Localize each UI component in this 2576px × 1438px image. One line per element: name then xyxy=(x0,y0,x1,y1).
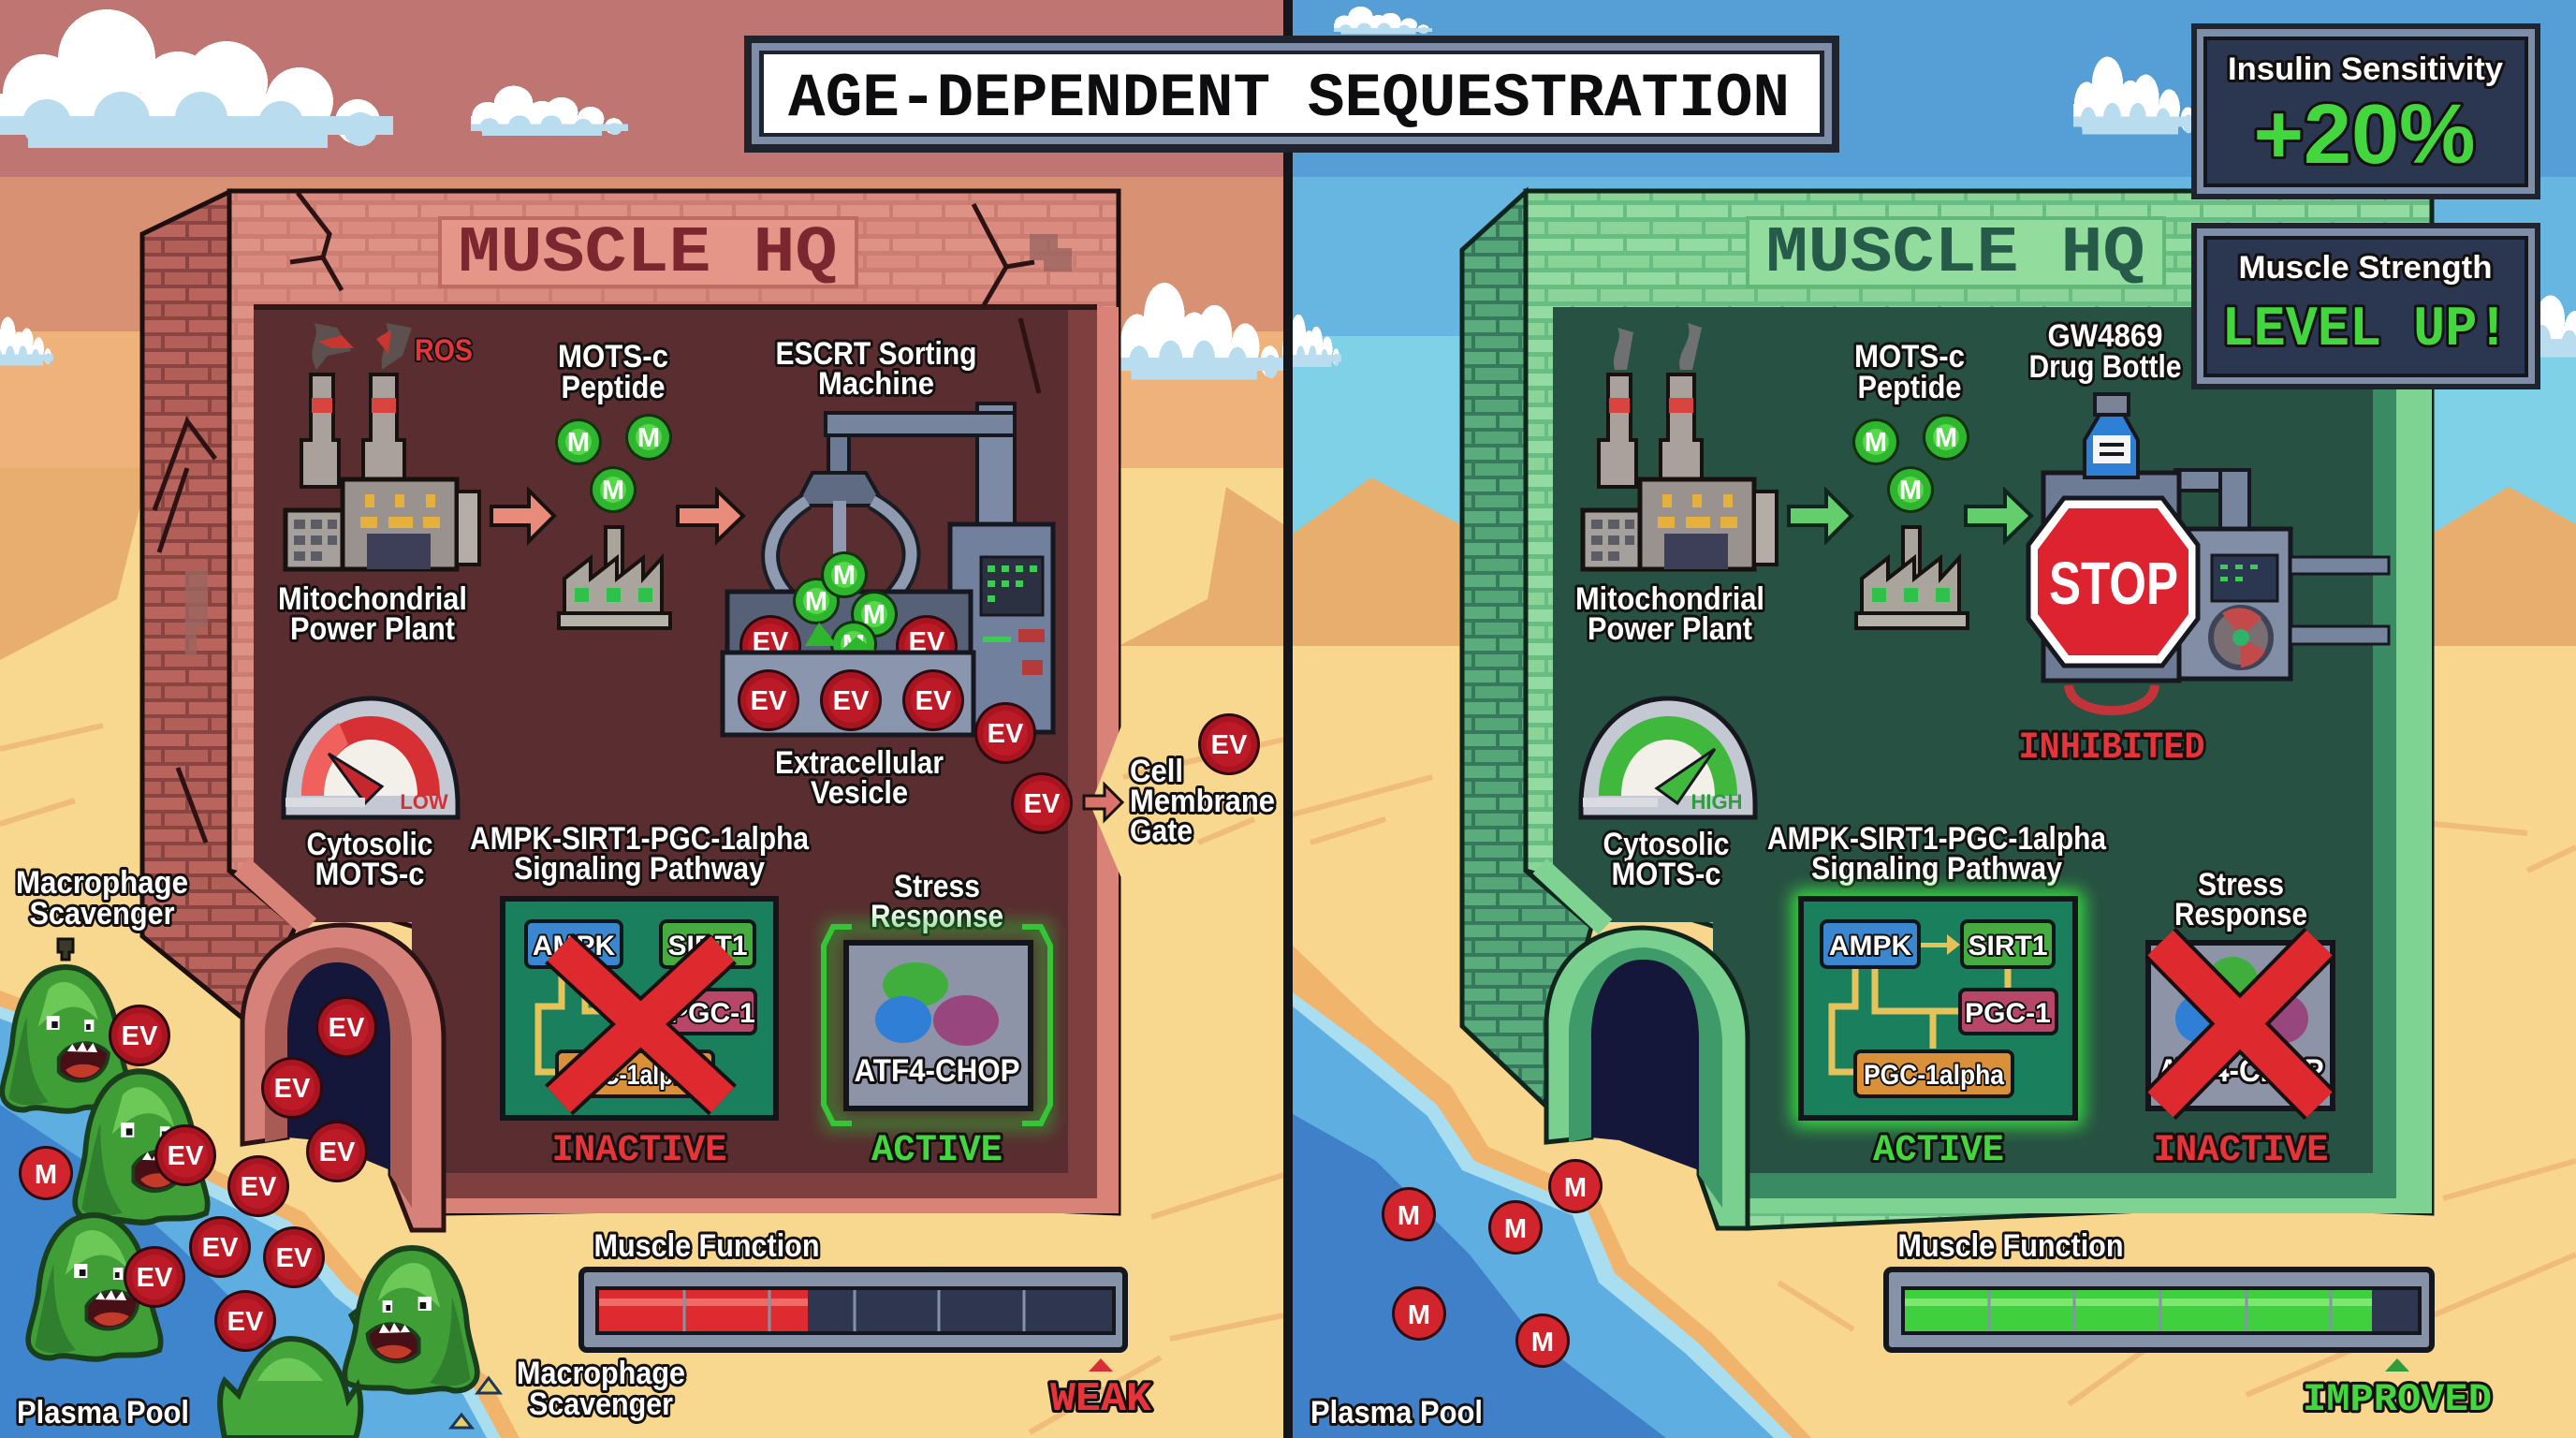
M peptides in plasma: M xyxy=(1408,1300,1430,1330)
label: Stress Response xyxy=(871,869,1003,934)
label: Macrophage Scavenger bottom: Macrophage xyxy=(517,1356,685,1391)
label: Cell Membrane Gate xyxy=(1130,754,1275,849)
label: Extracellular Vesicle xyxy=(775,745,944,811)
label: Cytosolic MOTS-c xyxy=(307,827,432,892)
gauge: cytosolic MOTS-c high: HIGH xyxy=(1690,790,1743,814)
icon: MOTS-c peptide badges: M xyxy=(602,476,624,506)
arrow: peptide to sorter xyxy=(678,491,743,541)
label: signaling pathway xyxy=(470,821,810,887)
label: Cytosolic MOTS-c: Cytosolic xyxy=(1603,827,1730,862)
icon: MOTS-c peptide badges: M xyxy=(637,423,660,453)
wall damage patches xyxy=(185,234,1072,655)
tunnel arch xyxy=(1546,928,1748,1228)
icon: MOTS-c peptide badges: M xyxy=(1865,428,1887,458)
label: Cytosolic MOTS-c: MOTS-c xyxy=(315,857,425,892)
vesicles in tunnel xyxy=(227,996,377,1217)
icon: ESCRT sorting machine: EV xyxy=(909,627,945,657)
icon: small factory xyxy=(559,527,670,628)
node: AMPK xyxy=(526,921,622,967)
label: Macrophage Scavenger bottom: Scavenger xyxy=(529,1387,673,1422)
label: ESCRT Sorting Machine xyxy=(775,336,977,402)
label: Plasma Pool left: Plasma Pool xyxy=(17,1395,189,1431)
background: left aged scene xyxy=(0,0,1283,1438)
node: PGC-1 xyxy=(669,990,755,1034)
label: ROS: ROS xyxy=(415,333,473,367)
label: ESCRT Sorting Machine: ESCRT Sorting xyxy=(775,336,977,372)
label: GW4869 Drug Bottle: GW4869 xyxy=(2048,318,2162,354)
vesicles in tunnel: EV xyxy=(329,1013,365,1043)
label: Mitochondrial Power Plant: Power Plant xyxy=(1588,611,1752,647)
label: MOTS-c Peptide: MOTS-c xyxy=(1854,339,1965,374)
clouds: left sky xyxy=(0,9,1284,380)
vesicle outside: EV xyxy=(1211,730,1248,760)
vesicles in tunnel: EV xyxy=(319,1137,356,1167)
building side wall xyxy=(142,192,296,1020)
icon: small factory xyxy=(1856,527,1968,628)
label: signaling pathway: AMPK-SIRT1-PGC-1alpha xyxy=(470,821,810,857)
label: Mitochondrial Power Plant: Mitochondrial xyxy=(278,581,467,617)
tunnel arch xyxy=(242,925,444,1230)
label: Cytosolic MOTS-c: Cytosolic xyxy=(307,827,432,862)
panel: left Muscle HQ building xyxy=(142,191,1121,1230)
label: Stress Response xyxy=(2174,867,2307,932)
status: ACTIVE: ACTIVE xyxy=(1873,1130,2004,1172)
vesicles in plasma: EV xyxy=(276,1243,313,1273)
icon: ESCRT sorting machine: EV xyxy=(833,686,870,716)
gauge: cytosolic MOTS-c high xyxy=(1581,698,1755,817)
bar: muscle function improved xyxy=(1886,1269,2432,1350)
icon: MOTS-c peptide badges: M xyxy=(567,428,590,458)
label: Mitochondrial Power Plant: Mitochondrial xyxy=(1575,581,1764,617)
status: INACTIVE: INACTIVE xyxy=(2153,1130,2329,1172)
divider xyxy=(1283,0,1293,1438)
small marker icons xyxy=(58,939,500,1428)
label: Macrophage Scavenger bottom xyxy=(517,1356,685,1422)
vesicles in plasma: EV xyxy=(202,1233,239,1263)
label: Stress Response: Response xyxy=(2174,897,2307,932)
label: signaling pathway: Signaling Pathway xyxy=(514,851,765,887)
label: signaling pathway: Signaling Pathway xyxy=(1811,851,2062,887)
icon: STOP sign: STOP xyxy=(2049,550,2178,617)
free M peptide: M xyxy=(35,1160,57,1190)
vesicle at gate: EV xyxy=(1024,789,1061,819)
label: Cell Membrane Gate: Cell xyxy=(1130,754,1183,789)
icon: red X xyxy=(2160,943,2320,1105)
M peptides in plasma: M xyxy=(1398,1201,1420,1231)
title banner: AGE-DEPENDENT SEQUESTRATION xyxy=(788,64,1790,134)
icon: ESCRT sorting machine: M xyxy=(842,630,865,660)
icon: ESCRT sorting machine: EV xyxy=(915,686,952,716)
label: GW4869 Drug Bottle: Drug Bottle xyxy=(2029,349,2181,385)
panel: stress response card blocked xyxy=(2148,943,2333,1108)
label: Cytosolic MOTS-c xyxy=(1603,827,1730,892)
icon: MOTS-c peptide badges: M xyxy=(1899,476,1922,506)
gauge: cytosolic MOTS-c low xyxy=(284,698,458,817)
status: INHIBITED: INHIBITED xyxy=(2018,727,2205,770)
M peptides in plasma: M xyxy=(1504,1214,1527,1244)
icon: ESCRT sorting machine: EV xyxy=(753,627,789,657)
vesicles in plasma xyxy=(109,1005,325,1352)
bar: muscle function weak xyxy=(581,1269,1125,1350)
gauge: cytosolic MOTS-c low: LOW xyxy=(400,790,448,814)
icon: MOTS-c peptide badges xyxy=(1852,414,1969,513)
metric card: insulin sensitivity xyxy=(2191,23,2540,199)
label: Mitochondrial Power Plant xyxy=(1575,581,1764,647)
arrow: through gate xyxy=(1084,785,1122,820)
status: WEAK: WEAK xyxy=(1050,1376,1152,1423)
free M peptide xyxy=(19,1146,73,1200)
label: MOTS-c Peptide: Peptide xyxy=(1857,370,1962,405)
arrow: plant to peptide xyxy=(491,491,554,541)
vesicle outside xyxy=(1198,713,1260,775)
background: right treated scene xyxy=(1293,0,2576,1438)
label: Muscle Function right: Muscle Function xyxy=(1898,1228,2123,1264)
label: Mitochondrial Power Plant: Power Plant xyxy=(290,611,455,647)
label: Stress Response: Response xyxy=(871,899,1003,934)
node: PGC-1: PGC-1 xyxy=(669,998,755,1029)
label: Macrophage Scavenger top xyxy=(16,865,188,932)
metric value: LEVEL UP! xyxy=(2222,299,2509,362)
label: Cell Membrane Gate: Gate xyxy=(1130,814,1193,849)
vesicles in plasma: EV xyxy=(227,1307,264,1337)
icon: MOTS-c peptide badges: M xyxy=(1935,423,1957,453)
label: Macrophage Scavenger top: Macrophage xyxy=(16,865,188,901)
building front wall xyxy=(229,191,1119,1213)
label: Macrophage Scavenger top: Scavenger xyxy=(30,896,174,932)
vesicle leaving machine: EV xyxy=(988,719,1024,749)
icon: ESCRT sorting machine: EV xyxy=(751,686,787,716)
metric value: +20% xyxy=(2254,88,2475,182)
status: ACTIVE: ACTIVE xyxy=(871,1130,1003,1172)
vesicles in plasma: EV xyxy=(137,1263,173,1293)
icon: MOTS-c peptide badges xyxy=(555,414,672,513)
label: Extracellular Vesicle: Extracellular xyxy=(775,745,944,781)
building front wall xyxy=(1526,191,2432,1228)
icon: ESCRT sorting machine: M xyxy=(805,587,827,617)
status: IMPROVED: IMPROVED xyxy=(2303,1377,2492,1422)
node: SIRT1 xyxy=(661,921,754,967)
plasma pool water: right xyxy=(1293,946,1811,1438)
wall cracks xyxy=(154,193,1039,843)
label: signaling pathway xyxy=(1767,821,2107,887)
interior room xyxy=(254,307,1097,1203)
icon: ESCRT sorting machine xyxy=(723,404,1053,735)
plasma pool water: left xyxy=(0,990,520,1438)
node: PGC-1alpha: PGC-1alpha xyxy=(1864,1060,2004,1091)
metric label: Muscle Strength xyxy=(2239,250,2492,286)
label: Cytosolic MOTS-c: MOTS-c xyxy=(1612,857,1720,892)
node: PGC-1 xyxy=(1960,990,2056,1034)
label: Stress Response: Stress xyxy=(2198,867,2284,902)
node: AMPK xyxy=(1822,921,1919,967)
node: SIRT1: SIRT1 xyxy=(667,931,748,961)
label: Mitochondrial Power Plant xyxy=(278,581,467,647)
label: GW4869 Drug Bottle xyxy=(2029,318,2181,385)
icon: halted machine xyxy=(2043,470,2389,711)
panel: signaling circuit board, blocked xyxy=(503,899,776,1118)
title banner xyxy=(744,36,1839,153)
status: INACTIVE: INACTIVE xyxy=(552,1130,726,1172)
node: PGC-1alpha xyxy=(557,1051,713,1096)
icon: drug bottle xyxy=(2085,394,2138,477)
metric card: muscle strength xyxy=(2191,223,2540,389)
vesicle at gate xyxy=(1011,772,1073,834)
icon: mitochondrial power plant, smoky xyxy=(285,323,479,569)
sign: MUSCLE HQ: MUSCLE HQ xyxy=(1765,217,2145,291)
diagonal wall xyxy=(1540,866,1605,927)
M peptides in plasma xyxy=(1382,1159,1603,1368)
label: ESCRT Sorting Machine: Machine xyxy=(818,366,934,402)
label: MOTS-c Peptide: Peptide xyxy=(562,370,665,405)
node: AMPK: AMPK xyxy=(533,931,615,961)
arrow: peptide to drug xyxy=(1966,491,2031,541)
vesicles in plasma: EV xyxy=(168,1141,204,1171)
icon: STOP sign xyxy=(2028,498,2198,666)
label: Cell Membrane Gate: Membrane xyxy=(1130,784,1275,819)
vesicles in tunnel: EV xyxy=(241,1172,277,1202)
label: Muscle Function left: Muscle Function xyxy=(593,1228,820,1264)
label: Stress Response: Stress xyxy=(894,869,980,904)
label: Extracellular Vesicle: Vesicle xyxy=(811,775,908,811)
clouds: right sky xyxy=(1282,7,2576,367)
icon: mitochondrial power plant, clean xyxy=(1583,323,1777,569)
panel: stress response card blocked: ATF4-CHOP xyxy=(2159,1053,2323,1089)
icon: red X xyxy=(559,948,723,1100)
macrophage slimes xyxy=(2,967,477,1438)
label: MOTS-c Peptide xyxy=(1854,339,1965,405)
vesicles in tunnel: EV xyxy=(274,1074,311,1104)
panel: right Muscle HQ building xyxy=(1462,191,2432,1228)
vesicles in plasma: EV xyxy=(122,1021,158,1051)
vesicle leaving machine xyxy=(974,702,1036,764)
node: PGC-1: PGC-1 xyxy=(1965,998,2051,1029)
panel: signaling circuit board, active xyxy=(1792,889,2085,1127)
building side wall xyxy=(1462,192,1591,1105)
node: AMPK: AMPK xyxy=(1829,931,1911,961)
node: PGC-1alpha xyxy=(1855,1051,2012,1096)
arrow: plant to peptide xyxy=(1789,491,1852,541)
label: signaling pathway: AMPK-SIRT1-PGC-1alpha xyxy=(1767,821,2107,857)
node: PGC-1alpha: PGC-1alpha xyxy=(569,1060,700,1091)
icon: ESCRT sorting machine: M xyxy=(863,600,886,630)
arrow: AMPK to SIRT1 xyxy=(1921,934,1960,955)
label: Plasma Pool right: Plasma Pool xyxy=(1310,1395,1483,1431)
icon: ESCRT sorting machine: M xyxy=(833,561,856,591)
diagonal wall xyxy=(242,866,309,927)
M peptides in plasma: M xyxy=(1564,1173,1587,1203)
label: MOTS-c Peptide xyxy=(558,339,668,405)
node: SIRT1 xyxy=(1962,921,2054,967)
M peptides in plasma: M xyxy=(1531,1328,1554,1357)
panel: stress response card active: ATF4-CHOP xyxy=(854,1053,1020,1089)
label: MOTS-c Peptide: MOTS-c xyxy=(558,339,668,374)
interior room xyxy=(1553,307,2396,1203)
cell membrane gate notch xyxy=(1090,726,1121,878)
panel: stress response card active xyxy=(824,927,1050,1123)
sign: MUSCLE HQ: MUSCLE HQ xyxy=(459,217,837,291)
metric label: Insulin Sensitivity xyxy=(2228,51,2503,87)
node: SIRT1: SIRT1 xyxy=(1968,931,2048,961)
